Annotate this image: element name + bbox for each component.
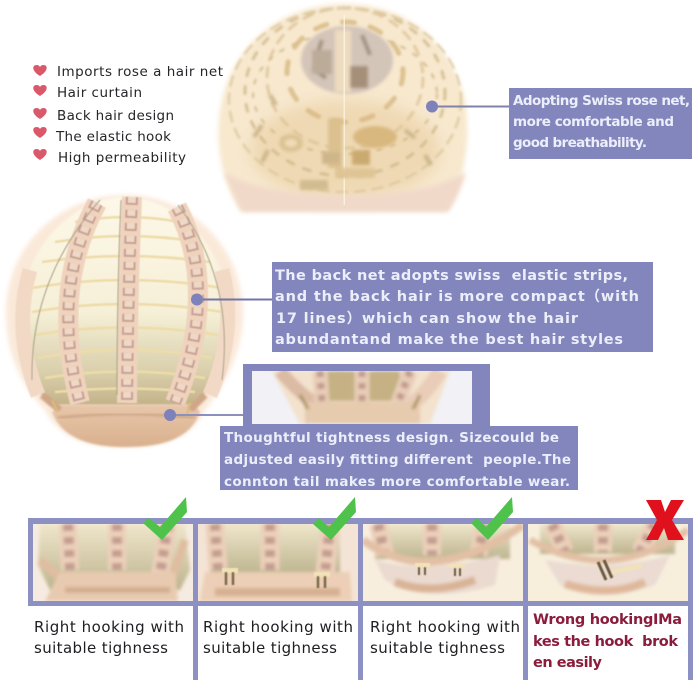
callout: tightness text: connton tail makes more comfortable wear.: [224, 474, 570, 490]
caption 3: suitable tighness: [370, 639, 505, 657]
list item: hair curtain: Hair curtain: [57, 85, 142, 101]
list item: back hair design: Back hair design: [57, 108, 174, 124]
caption 2: Right hooking with: [203, 618, 353, 636]
callout: Swiss rose net: Adopting Swiss rose net,: [513, 93, 690, 109]
hair ribs: [32, 217, 222, 392]
list item: elastic hook: The elastic hook: [55, 129, 171, 145]
photo 3: [363, 524, 523, 601]
check mark 3: [471, 497, 513, 540]
caption 4: wrong hooking: [533, 612, 682, 671]
caption 1: Right hooking with: [34, 618, 184, 636]
elastic band: [52, 405, 200, 447]
list item: high permeability: High permeability: [58, 150, 186, 166]
check mark 1: [143, 497, 187, 540]
check mark 2: [313, 497, 356, 540]
callout: Swiss rose net: more comfortable and: [513, 114, 674, 130]
callout: Swiss rose net: [426, 88, 692, 159]
photo 2: [198, 524, 358, 601]
callout: back net: [191, 262, 653, 352]
hooks: [42, 395, 205, 410]
callout: tightness text: [220, 426, 578, 490]
callout: back net: The back net adopts swiss elastic strips,: [275, 268, 628, 284]
callout: tightness connector and inset: [164, 364, 490, 428]
caption 4: wrong hooking: en easily: [533, 655, 603, 671]
callout: tightness text: Thoughtful tightness design. Sizecould be: [224, 430, 559, 446]
caption 1: suitable tighness: [34, 639, 168, 657]
photo 4: [528, 524, 688, 601]
lace crown patch: [301, 26, 393, 94]
inset photo: [252, 371, 472, 424]
caption 2: [203, 618, 353, 657]
centre seam: [344, 15, 345, 205]
callout: back net: abundantand make the best hair styles: [275, 332, 623, 348]
callout: back net: 17 lines）which can show the hair: [276, 310, 579, 327]
caption 3: [370, 618, 520, 657]
hooking comparison table: [28, 497, 693, 680]
photo 1: [33, 524, 193, 601]
callout: Swiss rose net: good breathability.: [513, 135, 647, 151]
list item: rose hair net: Imports rose a hair net: [57, 64, 223, 80]
caption 2: suitable tighness: [203, 639, 337, 657]
lace strips: [23, 197, 228, 403]
cross mark: [646, 500, 684, 540]
caption 4: wrong hooking: kes the hook brok: [533, 634, 678, 650]
caption 1: [34, 618, 184, 657]
feature list: [33, 64, 223, 166]
caption 4: wrong hooking: Wrong hookingIMa: [533, 612, 682, 628]
callout: back net: and the back hair is more compact（with: [275, 288, 639, 305]
table frame: [28, 518, 693, 680]
wig cap: top view: [218, 4, 467, 212]
caption 3: Right hooking with: [370, 618, 520, 636]
callout: tightness text: adjusted easily fitting different people.The: [224, 452, 571, 468]
wig cap: back view: [6, 195, 243, 447]
lace patches: [254, 95, 431, 190]
